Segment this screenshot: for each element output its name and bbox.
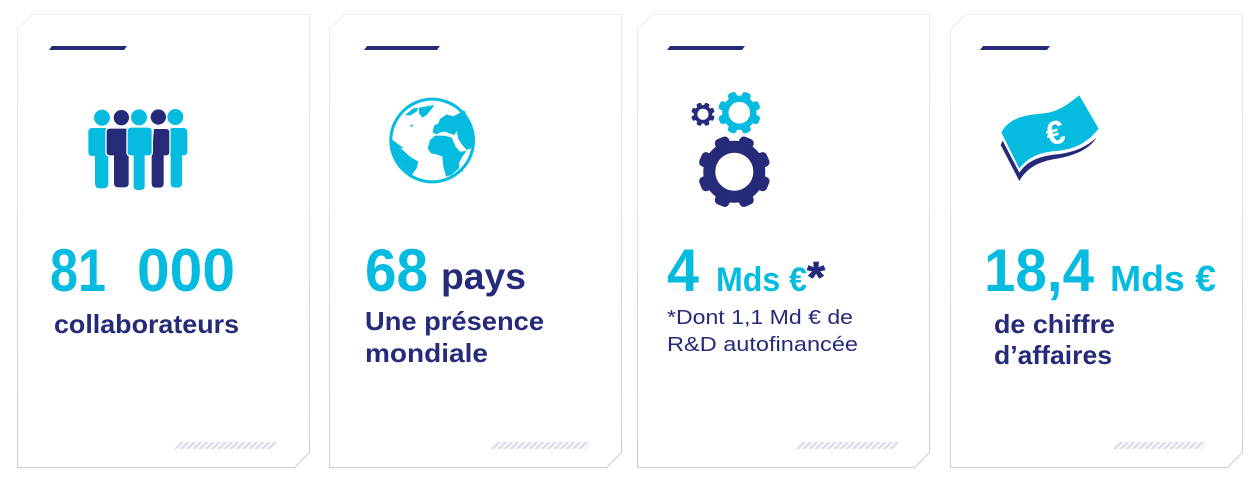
text: footnote: *Dont 1,1 Md € de: [667, 307, 853, 329]
figure: 68 pays: 68: [365, 237, 428, 304]
hatch: [794, 442, 900, 449]
hatch: [1112, 442, 1208, 449]
panel: collaborateurs: [18, 14, 310, 468]
text: footnote: R&D autofinancée: [667, 334, 858, 356]
accent bar: [49, 46, 127, 50]
figure: 81 000: 81: [50, 237, 106, 304]
accent bar: [364, 46, 440, 50]
hatch: [490, 442, 592, 449]
panel: chiffre d'affaires: [950, 14, 1242, 468]
figure: 18,4 Mds €: 18,4: [984, 237, 1095, 304]
figure: 18,4 Mds €: [984, 237, 1216, 304]
icon: globe: [390, 99, 474, 182]
icon: gears: [691, 91, 771, 208]
text: une présence mondiale: [365, 306, 544, 368]
figure: 4 Mds €: [667, 237, 826, 304]
figure: 68 pays: pays: [441, 256, 526, 297]
text: de chiffre d'affaires: [994, 309, 1115, 370]
figure: 4 Mds €: Mds €: [716, 261, 807, 299]
accent bar: [980, 46, 1050, 50]
icon: euro banknote: [1001, 95, 1099, 181]
figure: 4 Mds €: *: [807, 253, 826, 302]
figure: 81 000: 000: [137, 237, 235, 304]
panel: pays: [330, 14, 622, 468]
text: de chiffre d'affaires: d’affaires: [994, 340, 1112, 370]
hatch: [174, 442, 279, 449]
label: collaborateurs: collaborateurs: [54, 309, 239, 339]
panel: R&D: [638, 14, 930, 468]
icon: euro banknote: €: [1042, 112, 1069, 153]
text: footnote: [667, 307, 858, 356]
text: une présence mondiale: mondiale: [365, 338, 488, 368]
accent bar: [667, 46, 745, 50]
figure: 68 pays: [365, 237, 526, 304]
figure: 4 Mds €: 4: [667, 237, 700, 304]
text: de chiffre d'affaires: de chiffre: [994, 309, 1115, 339]
figure: 18,4 Mds €: Mds €: [1110, 258, 1216, 299]
text: une présence mondiale: Une présence: [365, 306, 544, 336]
figure: 81 000: [50, 237, 235, 304]
icon: group of people: [88, 109, 187, 191]
